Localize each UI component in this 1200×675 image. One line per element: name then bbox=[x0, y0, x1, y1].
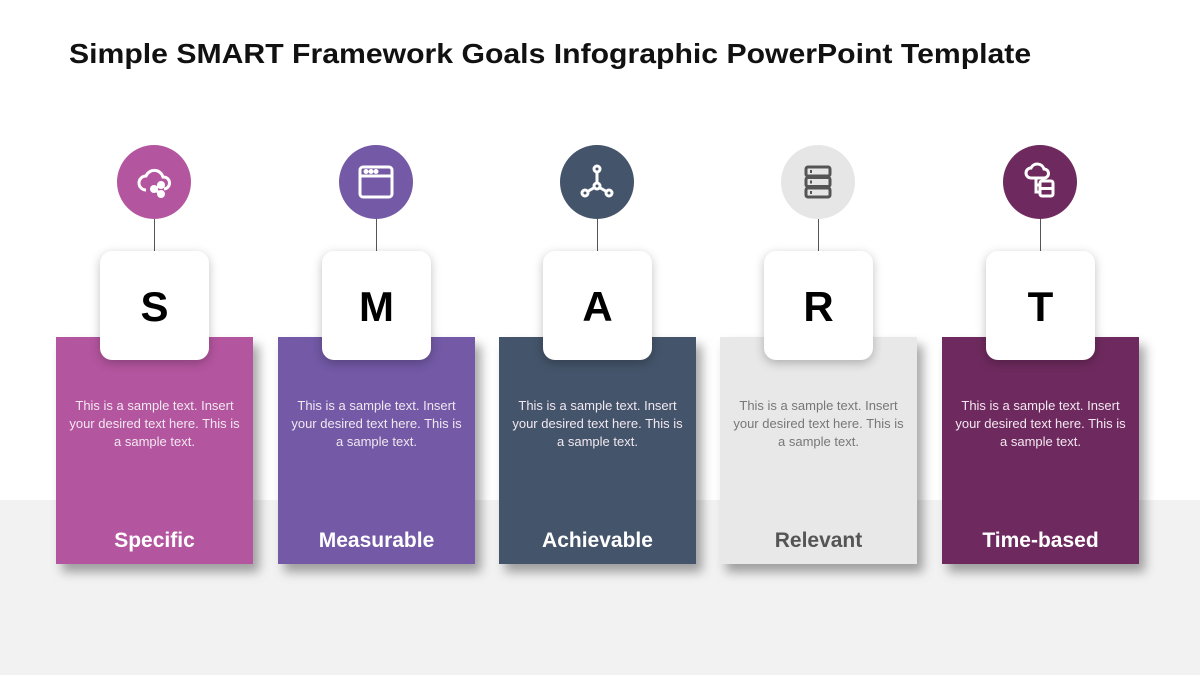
card bbox=[942, 337, 1139, 564]
panel: M measurable bbox=[278, 145, 488, 578]
letter M bbox=[322, 251, 431, 360]
letter S: S bbox=[140, 283, 168, 330]
title: Simple SMART Framework Goals Infographic PowerPoint Template bbox=[69, 38, 1031, 69]
card: Specific bbox=[114, 529, 195, 552]
letter S bbox=[100, 251, 209, 360]
card bbox=[56, 337, 253, 564]
card: This is a sample text. Insert your desired text here. This is a sample text. bbox=[291, 398, 462, 449]
card: This is a sample text. Insert your desired text here. This is a sample text. bbox=[733, 398, 904, 449]
letter R: R bbox=[803, 283, 834, 330]
card: Measurable bbox=[319, 529, 434, 552]
panel: A achievable bbox=[498, 145, 708, 578]
card: Relevant bbox=[775, 529, 862, 552]
card bbox=[499, 337, 696, 564]
panel: R relevant bbox=[720, 145, 930, 578]
card bbox=[720, 337, 917, 564]
letter M: M bbox=[359, 283, 394, 330]
panel: T time-based bbox=[942, 145, 1152, 578]
icon: server bbox=[781, 145, 855, 219]
card: Achievable bbox=[542, 529, 653, 552]
card: This is a sample text. Insert your desired text here. This is a sample text. bbox=[512, 398, 683, 449]
card: Time-based bbox=[982, 529, 1099, 552]
letter A bbox=[543, 251, 652, 360]
letter R bbox=[764, 251, 873, 360]
icon: browser window bbox=[339, 145, 413, 219]
icon: cloud share bbox=[117, 145, 191, 219]
icon: cloud database bbox=[1003, 145, 1077, 219]
card bbox=[278, 337, 475, 564]
card: This is a sample text. Insert your desired text here. This is a sample text. bbox=[69, 398, 240, 449]
letter T: T bbox=[1028, 283, 1053, 330]
panel: S specific bbox=[56, 145, 266, 578]
card: This is a sample text. Insert your desired text here. This is a sample text. bbox=[955, 398, 1126, 449]
letter A: A bbox=[582, 283, 613, 330]
icon: network bbox=[560, 145, 634, 219]
letter T bbox=[986, 251, 1095, 360]
